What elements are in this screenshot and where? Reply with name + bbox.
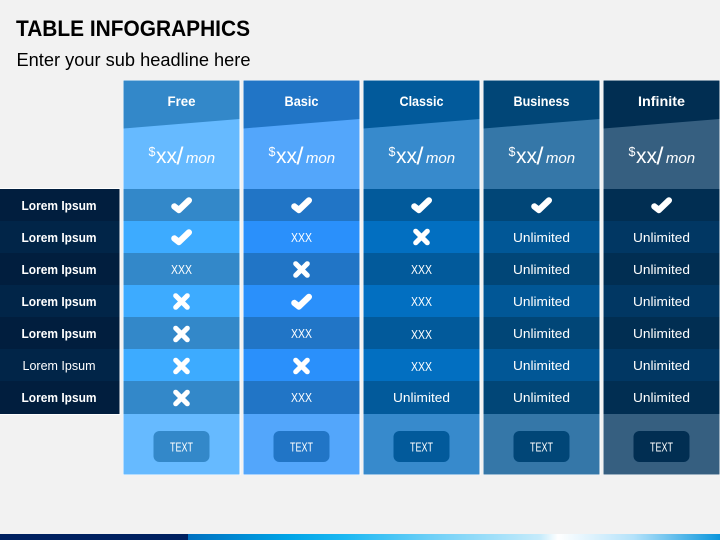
panel: Basic plan: xx: [276, 145, 298, 168]
panel: Business plan: Unlimited: [513, 326, 570, 341]
panel: Business plan: /: [537, 142, 544, 170]
panel: Classic plan: Unlimited: [393, 390, 450, 405]
panel: Business plan: xx: [516, 145, 538, 168]
panel: Classic plan: mon: [426, 150, 455, 167]
panel: Infinite plan: Unlimited: [633, 262, 690, 277]
button: Free: [154, 431, 210, 462]
button: Infinite: TEXT: [650, 440, 673, 454]
panel: Free plan: xx: [156, 145, 178, 168]
panel: row labels: Lorem Ipsum: [22, 390, 96, 405]
panel: row labels: Lorem Ipsum: [22, 230, 96, 245]
panel: Basic plan: XXX: [291, 230, 312, 245]
panel: Business plan: Unlimited: [513, 294, 570, 309]
panel: Free plan: Free: [168, 93, 196, 109]
panel: row labels: Lorem Ipsum: [22, 198, 96, 213]
panel: Classic plan: /: [417, 142, 424, 170]
panel: row labels: Lorem Ipsum: [22, 294, 96, 309]
button: Classic: TEXT: [410, 440, 433, 454]
panel: Business plan: Unlimited: [513, 230, 570, 245]
panel: Free plan: /: [177, 142, 184, 170]
button: Basic: TEXT: [290, 440, 313, 454]
panel: Infinite plan: Unlimited: [633, 326, 690, 341]
panel: Business plan: Unlimited: [513, 390, 570, 405]
panel: Infinite plan: [603, 80, 720, 475]
panel: row labels: Lorem Ipsum: [22, 262, 96, 277]
button: Business: TEXT: [530, 440, 553, 454]
subtitle: Enter your sub headline here: [16, 50, 250, 70]
panel: Classic plan: XXX: [411, 294, 432, 309]
button: Free: TEXT: [170, 440, 193, 454]
panel: row labels: Lorem Ipsum: [22, 326, 96, 341]
panel: Infinite plan: Unlimited: [633, 390, 690, 405]
panel: Free plan: $: [149, 145, 156, 159]
panel: Classic plan: XXX: [411, 327, 432, 342]
panel: row labels: Lorem Ipsum: [22, 358, 96, 373]
panel: Infinite plan: Unlimited: [633, 358, 690, 373]
panel: Free plan: mon: [186, 150, 215, 167]
panel: Classic plan: $: [389, 145, 396, 159]
panel: Basic plan: XXX: [291, 390, 312, 405]
panel: Classic plan: XXX: [411, 359, 432, 374]
panel: Infinite plan: xx: [636, 145, 658, 168]
panel: Basic plan: /: [297, 142, 304, 170]
panel: Basic plan: [243, 80, 360, 475]
panel: Classic plan: XXX: [411, 262, 432, 277]
button: Basic: [274, 431, 330, 462]
panel: Classic plan: [363, 80, 480, 475]
panel: Basic plan: Basic: [284, 93, 319, 109]
panel: Basic plan: $: [269, 145, 276, 159]
panel: Infinite plan: mon: [666, 150, 695, 167]
panel: Infinite plan: $: [629, 145, 636, 159]
button: Business: [514, 431, 570, 462]
panel: Classic plan: xx: [396, 145, 418, 168]
panel: Infinite plan: Infinite: [638, 93, 685, 109]
button: Classic: [394, 431, 450, 462]
panel: Business plan: Unlimited: [513, 262, 570, 277]
panel: row labels: [0, 188, 120, 415]
panel: Classic plan: Classic: [400, 93, 444, 109]
panel: Business plan: [483, 80, 600, 475]
footer gradient strip: [0, 534, 720, 540]
panel: Business plan: mon: [546, 150, 575, 167]
button: Infinite: [634, 431, 690, 462]
panel: Business plan: Business: [514, 93, 570, 109]
panel: Infinite plan: /: [657, 142, 664, 170]
panel: Basic plan: mon: [306, 150, 335, 167]
panel: Business plan: Unlimited: [513, 358, 570, 373]
panel: Infinite plan: Unlimited: [633, 230, 690, 245]
panel: Business plan: $: [509, 145, 516, 159]
panel: Free plan: XXX: [171, 262, 192, 277]
panel: Basic plan: XXX: [291, 326, 312, 341]
title: TABLE INFOGRAPHICS: [16, 16, 250, 41]
panel: Free plan: [123, 80, 240, 475]
panel: Infinite plan: Unlimited: [633, 294, 690, 309]
